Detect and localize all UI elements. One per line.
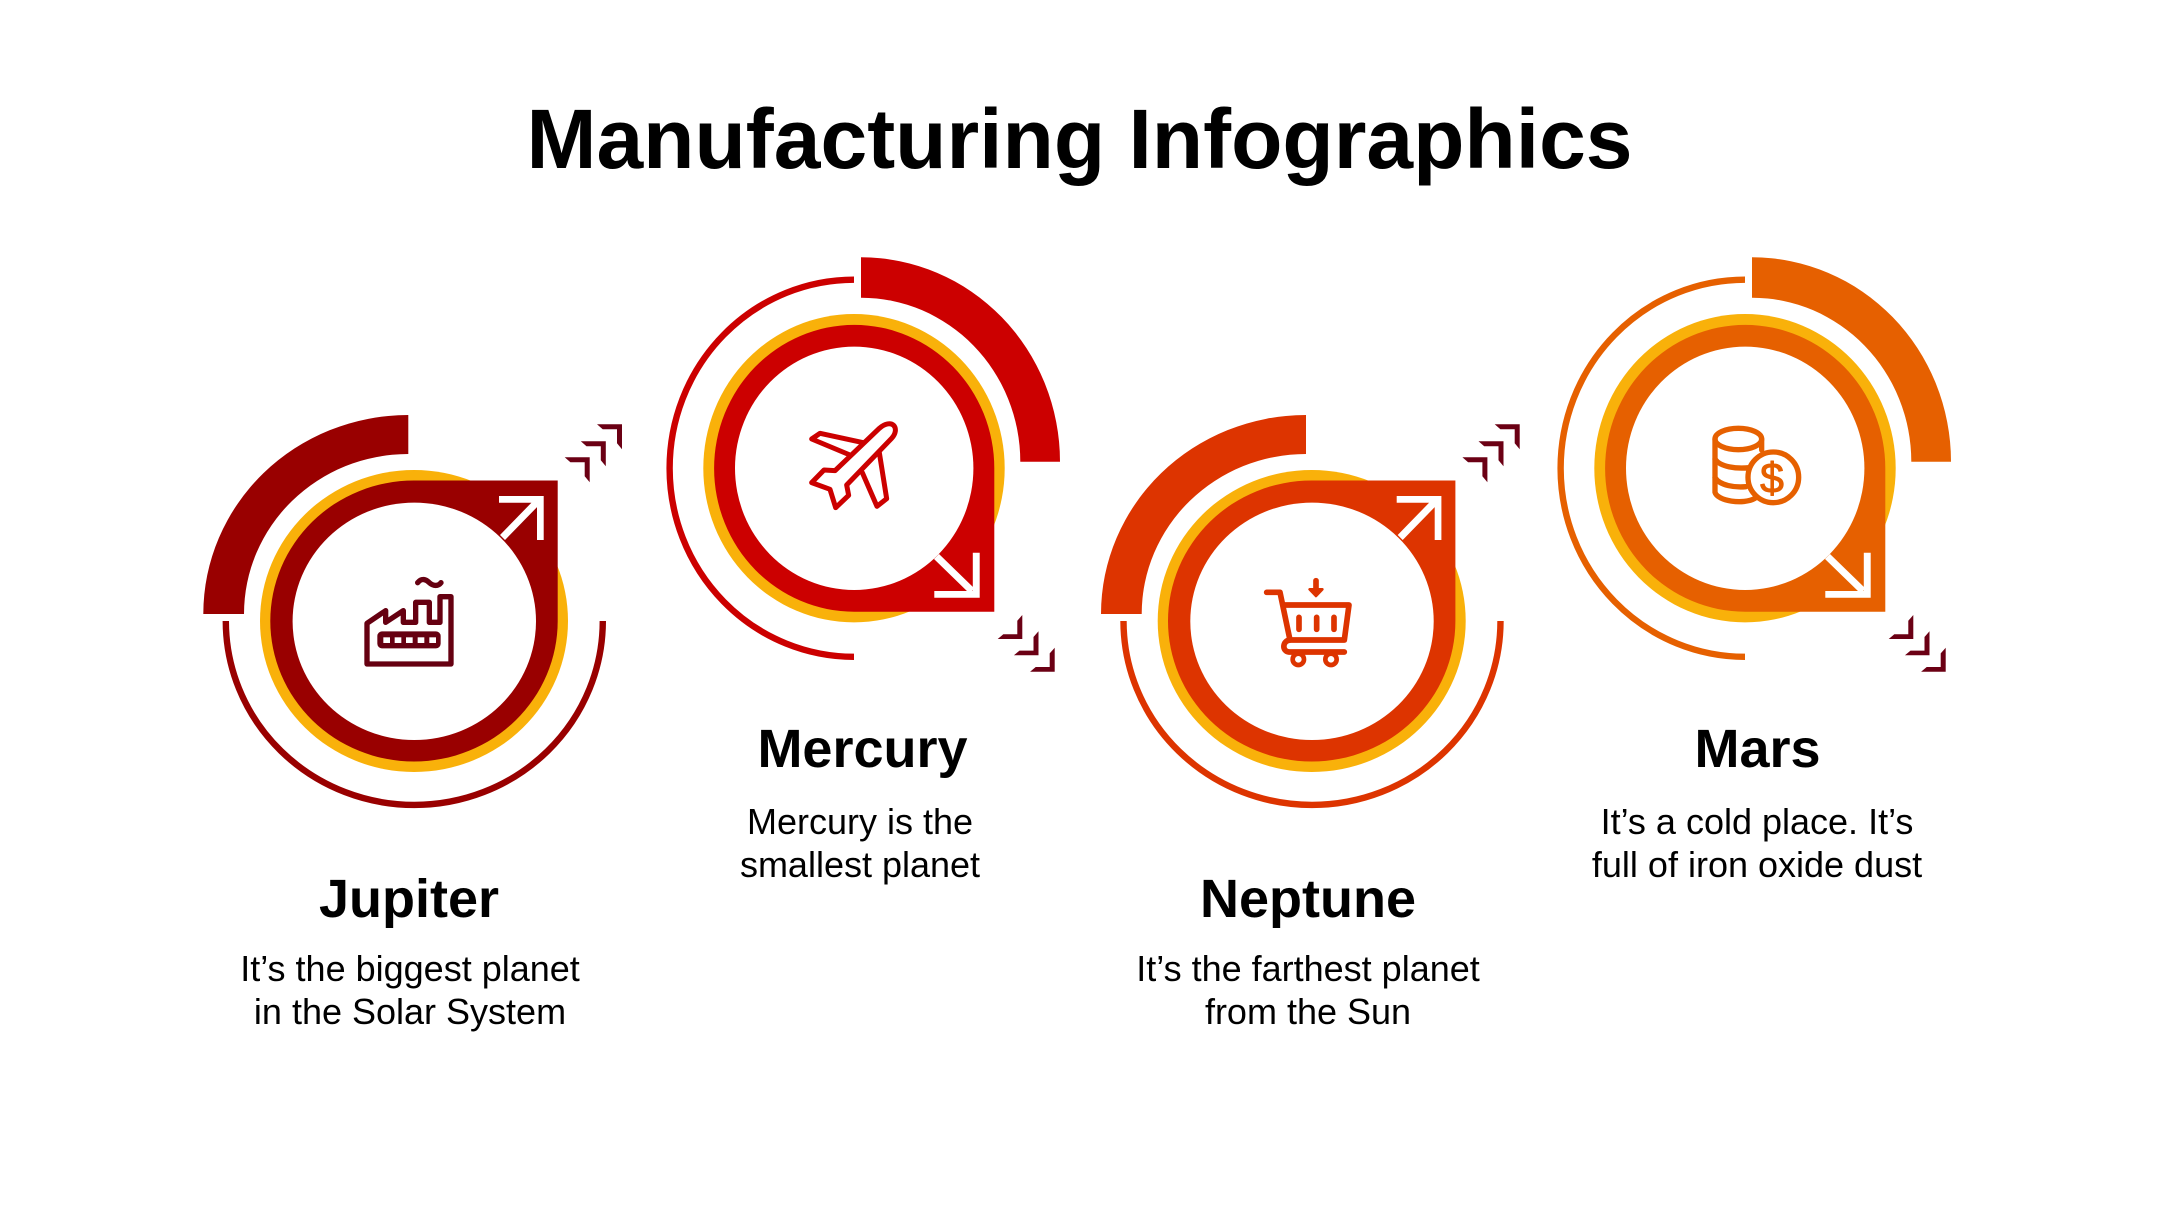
heading: Mars: Mars — [1694, 719, 1821, 779]
Mercury chevrons — [998, 615, 1055, 672]
heading: Neptune: Neptune — [1200, 869, 1416, 929]
panel: Jupiter — [203, 415, 622, 1032]
Jupiter thick arc — [203, 415, 408, 614]
Jupiter chevrons — [565, 424, 622, 482]
Mars circle graphic — [1561, 257, 1951, 672]
Jupiter gold circle — [260, 470, 568, 772]
title: Manufacturing Infographics — [526, 92, 1633, 186]
Mercury teardrop ring — [714, 325, 994, 612]
Mercury gold circle — [703, 314, 1005, 622]
Neptune circle graphic — [1101, 415, 1520, 805]
Jupiter arrow — [499, 496, 544, 540]
icon: airplane — [812, 424, 895, 508]
icon: coins: $ — [1760, 454, 1784, 502]
panel: Neptune — [1101, 415, 1520, 1032]
icon: shopping cart — [1267, 581, 1349, 665]
description: Neptune: It’s the farthest planet — [1136, 948, 1480, 989]
description: Jupiter: It’s the biggest planet — [240, 948, 580, 989]
Mercury arrow — [934, 553, 980, 598]
description: Mars: It’s a cold place. It’s — [1601, 801, 1913, 842]
description: Jupiter: in the Solar System — [254, 991, 566, 1032]
Jupiter thin arc — [226, 621, 603, 805]
heading: Jupiter: Jupiter — [319, 869, 499, 929]
description: Mars: full of iron oxide dust — [1592, 844, 1922, 885]
Mercury thick arc — [861, 257, 1060, 462]
panel: Mercury — [670, 257, 1060, 885]
Jupiter teardrop ring — [270, 480, 558, 762]
description: Mercury: smallest planet — [740, 844, 980, 885]
icon: coins — [1715, 428, 1799, 503]
Mercury thin arc — [670, 280, 854, 657]
panel: Mars — [1561, 257, 1951, 885]
description: Neptune: from the Sun — [1205, 991, 1411, 1032]
description: Mercury: Mercury is the — [747, 801, 973, 842]
heading: Mercury: Mercury — [757, 719, 968, 779]
icon: factory — [367, 580, 451, 664]
